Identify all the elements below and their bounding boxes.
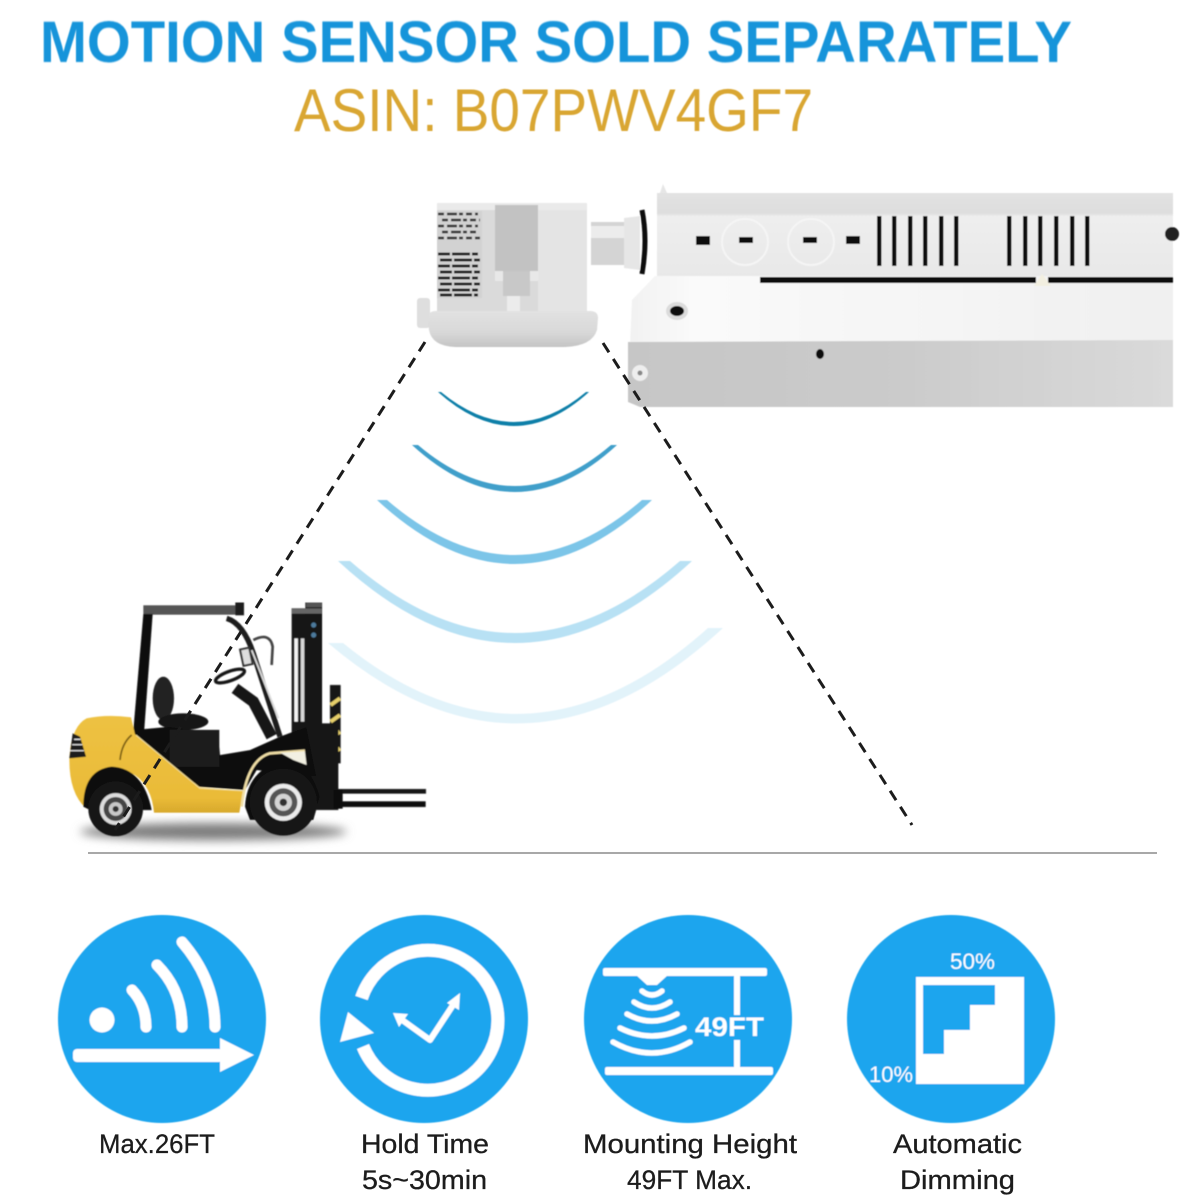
title: MOTION SENSOR SOLD SEPARATELY bbox=[40, 11, 1072, 75]
icon: max distance bbox=[58, 915, 266, 1123]
LED high bay fixture bbox=[628, 184, 1179, 407]
label: Automatic Dimming: Dimming bbox=[900, 1165, 1015, 1195]
icon: automatic dimming: 50% bbox=[950, 949, 995, 974]
subtitle: ASIN: ASIN: B07PWV4GF7 bbox=[294, 77, 813, 144]
label: Hold Time: 5s~30min bbox=[362, 1165, 487, 1195]
left detection dashed line bbox=[115, 342, 425, 830]
icon: automatic dimming bbox=[847, 915, 1055, 1123]
label: Automatic Dimming bbox=[893, 1129, 1022, 1195]
forklift bbox=[69, 603, 426, 840]
motion sensor bbox=[417, 203, 645, 347]
label: Mounting Height bbox=[583, 1129, 798, 1195]
label: Mounting Height: 49FT Max. bbox=[627, 1165, 752, 1195]
label: Mounting Height: Mounting Height bbox=[583, 1129, 798, 1159]
icon: hold time bbox=[320, 915, 528, 1123]
ground line bbox=[88, 852, 1157, 854]
sensing wave arcs bbox=[328, 392, 723, 723]
label: Hold Time bbox=[361, 1129, 489, 1195]
right detection dashed line bbox=[603, 343, 912, 825]
label: Hold Time: Hold Time bbox=[361, 1129, 489, 1159]
label: Max.26FT: Max.26FT bbox=[99, 1129, 215, 1159]
icon: mounting height bbox=[584, 915, 792, 1123]
icon: mounting height: 49FT bbox=[695, 1012, 765, 1042]
icon: automatic dimming: 10% bbox=[869, 1062, 913, 1087]
label: Automatic Dimming: Automatic bbox=[893, 1129, 1022, 1159]
